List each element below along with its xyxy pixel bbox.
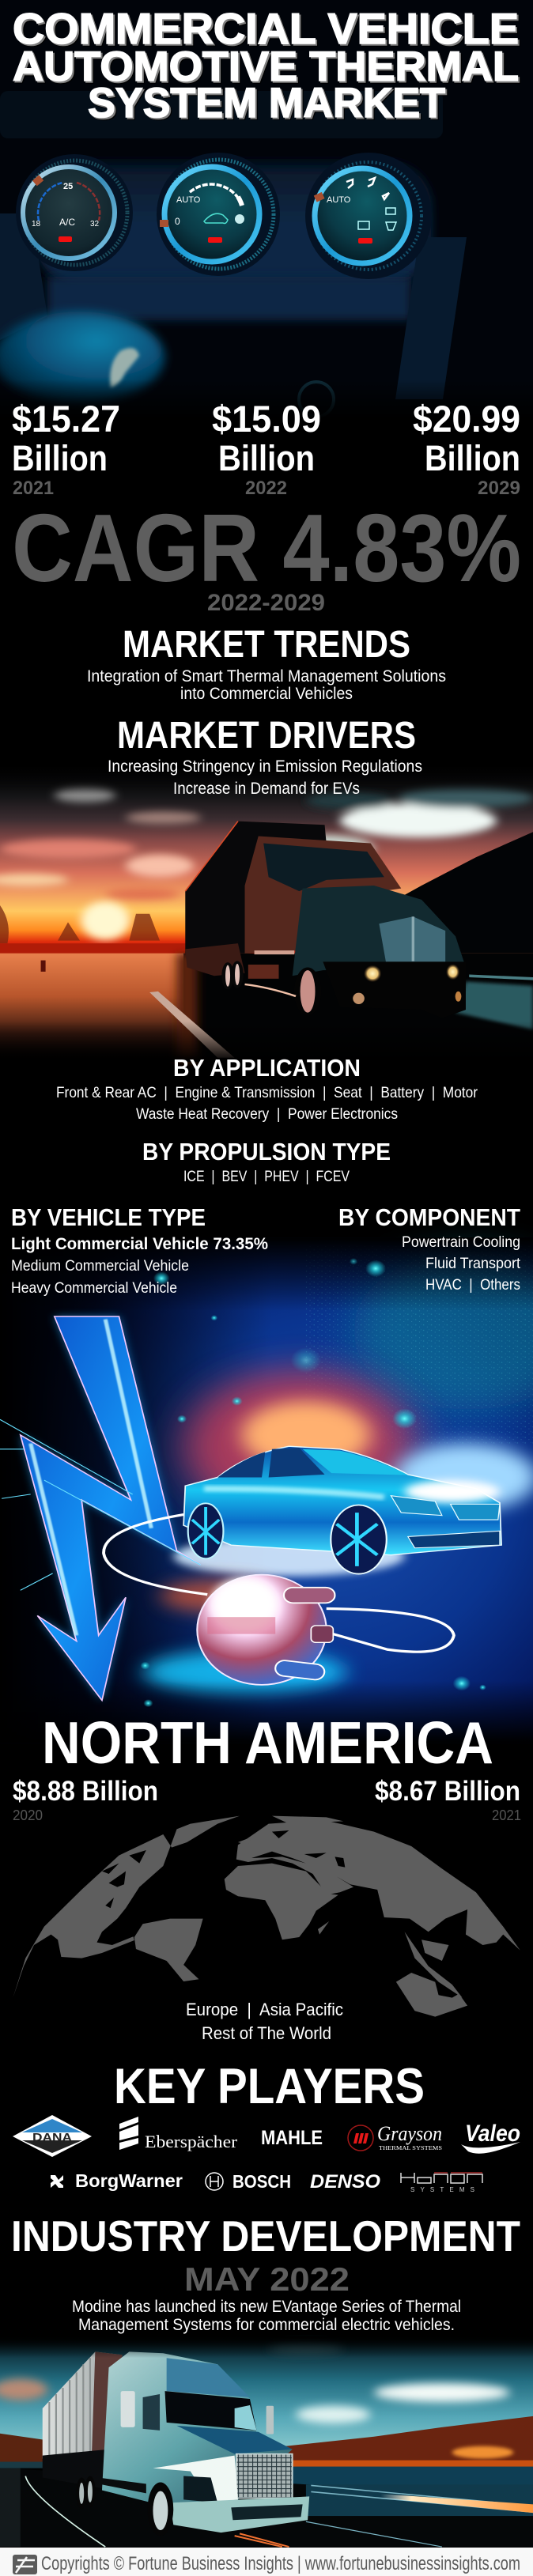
segment: by application: Waste Heat Recovery | Power Electronics bbox=[136, 1105, 398, 1123]
road bbox=[0, 954, 533, 1060]
truck bbox=[185, 822, 466, 1018]
development text: Management Systems for commercial electric vehicles. bbox=[78, 2315, 455, 2334]
segment: by propulsion type: BY PROPULSION TYPE bbox=[142, 1138, 391, 1165]
dial: air mode: AUTO bbox=[327, 195, 351, 205]
africa land bbox=[225, 1864, 338, 1940]
segment: by component: Fluid Transport bbox=[425, 1255, 521, 1272]
segment: by component bbox=[338, 1203, 521, 1294]
segment: by vehicle type: Light Commercial Vehicle 73.35% bbox=[11, 1234, 268, 1253]
dial: temperature: 25 bbox=[63, 182, 73, 191]
dial: temperature: A/C bbox=[59, 217, 75, 228]
EV charging illustration bbox=[0, 1237, 533, 1743]
glowing particles bbox=[141, 1258, 486, 1707]
heading: key players: KEY PLAYERS bbox=[114, 2059, 425, 2114]
title: AUTOMOTIVE THERMAL bbox=[13, 43, 519, 90]
stat: 2029 market size: Billion bbox=[425, 438, 520, 478]
stat: 2022 market size: $15.09 bbox=[212, 398, 321, 440]
development text bbox=[72, 2297, 461, 2334]
heading: market drivers: MARKET DRIVERS bbox=[117, 715, 416, 757]
north america land bbox=[13, 1816, 240, 1998]
market drivers text: Increase in Demand for EVs bbox=[173, 779, 360, 798]
market trends text: into Commercial Vehicles bbox=[180, 684, 353, 703]
segment: by application: BY APPLICATION bbox=[173, 1054, 361, 1082]
stat: North America 2021 bbox=[375, 1776, 521, 1823]
stat: 2029 market size bbox=[413, 398, 520, 499]
maritime asia land bbox=[405, 1932, 463, 1998]
segment: by component: Powertrain Cooling bbox=[402, 1233, 520, 1251]
dial: temperature: 18 bbox=[32, 220, 41, 229]
stat: 2021 market size: Billion bbox=[12, 438, 108, 478]
segment: by application bbox=[56, 1054, 478, 1123]
logo: BorgWarner: BorgWarner bbox=[75, 2170, 183, 2191]
stat: North America 2020 bbox=[13, 1776, 158, 1823]
logo: Eberspacher bbox=[119, 2117, 238, 2151]
logo: Eberspacher: Eberspächer bbox=[145, 2132, 238, 2151]
dark hill bbox=[391, 832, 533, 970]
logo: Valeo: Valeo bbox=[465, 2121, 520, 2147]
segment: by propulsion type bbox=[142, 1138, 391, 1185]
stat: 2022 market size bbox=[212, 398, 321, 499]
other regions: Europe | Asia Pacific bbox=[186, 2000, 343, 2019]
stat: 2021 market size bbox=[12, 398, 120, 499]
dial: temperature: 32 bbox=[90, 220, 100, 229]
semi truck bbox=[43, 2351, 309, 2536]
electric car bbox=[183, 1446, 501, 1574]
segment: by vehicle type: Heavy Commercial Vehicle bbox=[11, 1279, 177, 1297]
tree line bbox=[0, 943, 191, 954]
world map globe bbox=[13, 1816, 520, 2017]
dial: temperature bbox=[16, 154, 133, 271]
sunset truck image bbox=[0, 761, 533, 1062]
logo: Dana: DANA bbox=[32, 2131, 72, 2144]
market drivers text: Increasing Stringency in Emission Regulations bbox=[108, 757, 422, 776]
stat: 2021 market size: 2021 bbox=[13, 478, 54, 499]
CAGR period: 2022-2029 bbox=[207, 590, 325, 616]
stat: North America 2020: 2020 bbox=[13, 1807, 43, 1823]
logo: Grayson: Grayson bbox=[377, 2122, 442, 2145]
logo: Denso: DENSO bbox=[310, 2171, 380, 2193]
stat: North America 2021: 2021 bbox=[492, 1807, 521, 1823]
segment: by component: BY COMPONENT bbox=[338, 1203, 520, 1231]
dial: fan speed bbox=[157, 153, 280, 276]
segment: by vehicle type: BY VEHICLE TYPE bbox=[11, 1203, 206, 1231]
stat: 2029 market size: $20.99 bbox=[413, 398, 520, 440]
logo: Valeo bbox=[461, 2121, 520, 2154]
charging cable bbox=[104, 1515, 454, 1652]
dial: fan speed: 0 bbox=[175, 216, 180, 227]
hero image: car climate control panel bbox=[0, 0, 533, 419]
logo: Bosch: BOSCH bbox=[232, 2171, 291, 2192]
development text: Modine has launched its new EVantage Series of Thermal bbox=[72, 2297, 461, 2316]
logo: Grayson: THERMAL SYSTEMS bbox=[379, 2144, 442, 2151]
stat: 2029 market size: 2029 bbox=[478, 478, 520, 499]
title: SYSTEM MARKET bbox=[88, 80, 445, 127]
highway truck image bbox=[0, 2336, 533, 2547]
market trends text: Integration of Smart Thermal Management Solutions bbox=[87, 667, 446, 686]
stat: 2022 market size: Billion bbox=[218, 438, 315, 478]
development date: MAY 2022 bbox=[184, 2261, 350, 2298]
eurasia land bbox=[236, 1820, 520, 1951]
logo: Hanon Systems bbox=[401, 2173, 482, 2193]
logo: Hanon Systems: SYSTEMS bbox=[410, 2186, 474, 2193]
segment: by vehicle type: Medium Commercial Vehicle bbox=[11, 1257, 189, 1275]
segment: by vehicle type bbox=[11, 1203, 268, 1297]
stat: 2022 market size: 2022 bbox=[245, 478, 287, 499]
segment: by application: Front & Rear AC | Engine & Transmission | Seat | Battery | Motor bbox=[56, 1084, 478, 1101]
market drivers text bbox=[108, 757, 422, 798]
clouds bbox=[0, 788, 533, 900]
market trends text bbox=[87, 667, 446, 703]
title bbox=[13, 4, 519, 127]
lightning bolt bbox=[0, 1316, 201, 1701]
footer bbox=[0, 2548, 533, 2576]
logo: Dana bbox=[13, 2115, 92, 2157]
dial: air mode bbox=[305, 153, 432, 279]
heading: market trends: MARKET TRENDS bbox=[123, 624, 410, 666]
segment: by component: HVAC | Others bbox=[425, 1276, 520, 1294]
footer logo bbox=[13, 2555, 37, 2574]
south america land bbox=[134, 1919, 203, 1981]
logo: Grayson bbox=[348, 2122, 442, 2151]
stat: North America 2021: $8.67 Billion bbox=[375, 1776, 520, 1807]
other regions: Rest of The World bbox=[202, 2023, 331, 2043]
charging plug bbox=[197, 1575, 335, 1685]
stat: North America 2020: $8.88 Billion bbox=[13, 1776, 158, 1807]
segment: by propulsion type: ICE | BEV | PHEV | FCEV bbox=[183, 1168, 350, 1185]
title: COMMERCIAL VEHICLE bbox=[13, 4, 519, 53]
heading: north america: NORTH AMERICA bbox=[42, 1709, 493, 1776]
australia land bbox=[396, 1973, 467, 2017]
logo: Bosch bbox=[206, 2171, 291, 2192]
stat: 2021 market size: $15.27 bbox=[12, 398, 120, 440]
dial: fan speed: AUTO bbox=[176, 195, 201, 205]
logo: Mahle: MAHLE bbox=[261, 2127, 323, 2149]
other regions bbox=[186, 2000, 343, 2043]
